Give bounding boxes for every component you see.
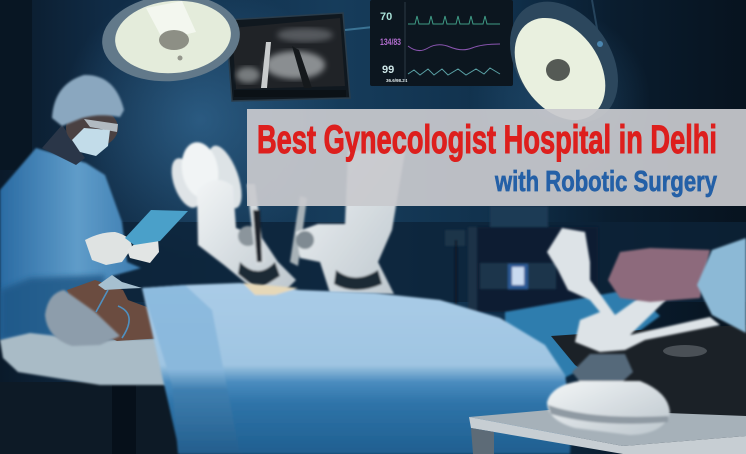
monitor: vital signs bbox=[370, 0, 513, 86]
monitor: vital signs: 70 bbox=[380, 11, 392, 23]
left instrument bbox=[247, 184, 265, 266]
surgical lamp right bbox=[488, 0, 640, 143]
surgical mask bbox=[72, 128, 110, 156]
surgical lamp left bbox=[99, 0, 243, 87]
pillow bbox=[0, 333, 172, 385]
oxygen mask bbox=[98, 275, 142, 290]
left glove bbox=[85, 232, 132, 265]
equipment cart bbox=[445, 206, 598, 312]
doctor gown bbox=[0, 148, 141, 340]
monitor: vital signs: 99 bbox=[382, 64, 394, 76]
right glove bbox=[127, 239, 159, 263]
left arm column bbox=[197, 180, 296, 292]
gloved hand bbox=[608, 248, 710, 302]
left arm lobes bbox=[166, 154, 206, 212]
bed bbox=[0, 382, 180, 454]
controller table bbox=[469, 409, 746, 454]
incision opening bbox=[243, 283, 298, 295]
patient skin bbox=[67, 280, 162, 341]
sleeve bbox=[697, 238, 746, 333]
dark tablet panel bbox=[551, 325, 746, 416]
glasses bbox=[84, 119, 118, 132]
hair net bbox=[45, 290, 120, 346]
monitor: vital signs: 36.6/98.24 bbox=[386, 78, 408, 83]
title banner bbox=[247, 109, 746, 206]
surgical cap bbox=[52, 75, 124, 126]
patient bbox=[45, 275, 162, 346]
sheet flap bbox=[142, 285, 240, 454]
monitor: endoscope view bbox=[226, 13, 373, 101]
right instrument bbox=[290, 196, 307, 266]
robotic arms bbox=[166, 139, 405, 294]
console joint bbox=[572, 354, 633, 382]
doctor face bbox=[66, 108, 118, 148]
robot control console bbox=[547, 228, 720, 435]
far sheet bbox=[505, 289, 660, 380]
tablet bbox=[125, 210, 188, 245]
console arm bbox=[547, 228, 720, 352]
monitor: vital signs: 134/83 bbox=[380, 37, 401, 48]
surgical sheet bbox=[142, 283, 572, 454]
right arm bbox=[296, 150, 405, 294]
doctor bbox=[0, 75, 188, 340]
doctor neck bbox=[42, 125, 85, 165]
console base bbox=[547, 381, 670, 435]
